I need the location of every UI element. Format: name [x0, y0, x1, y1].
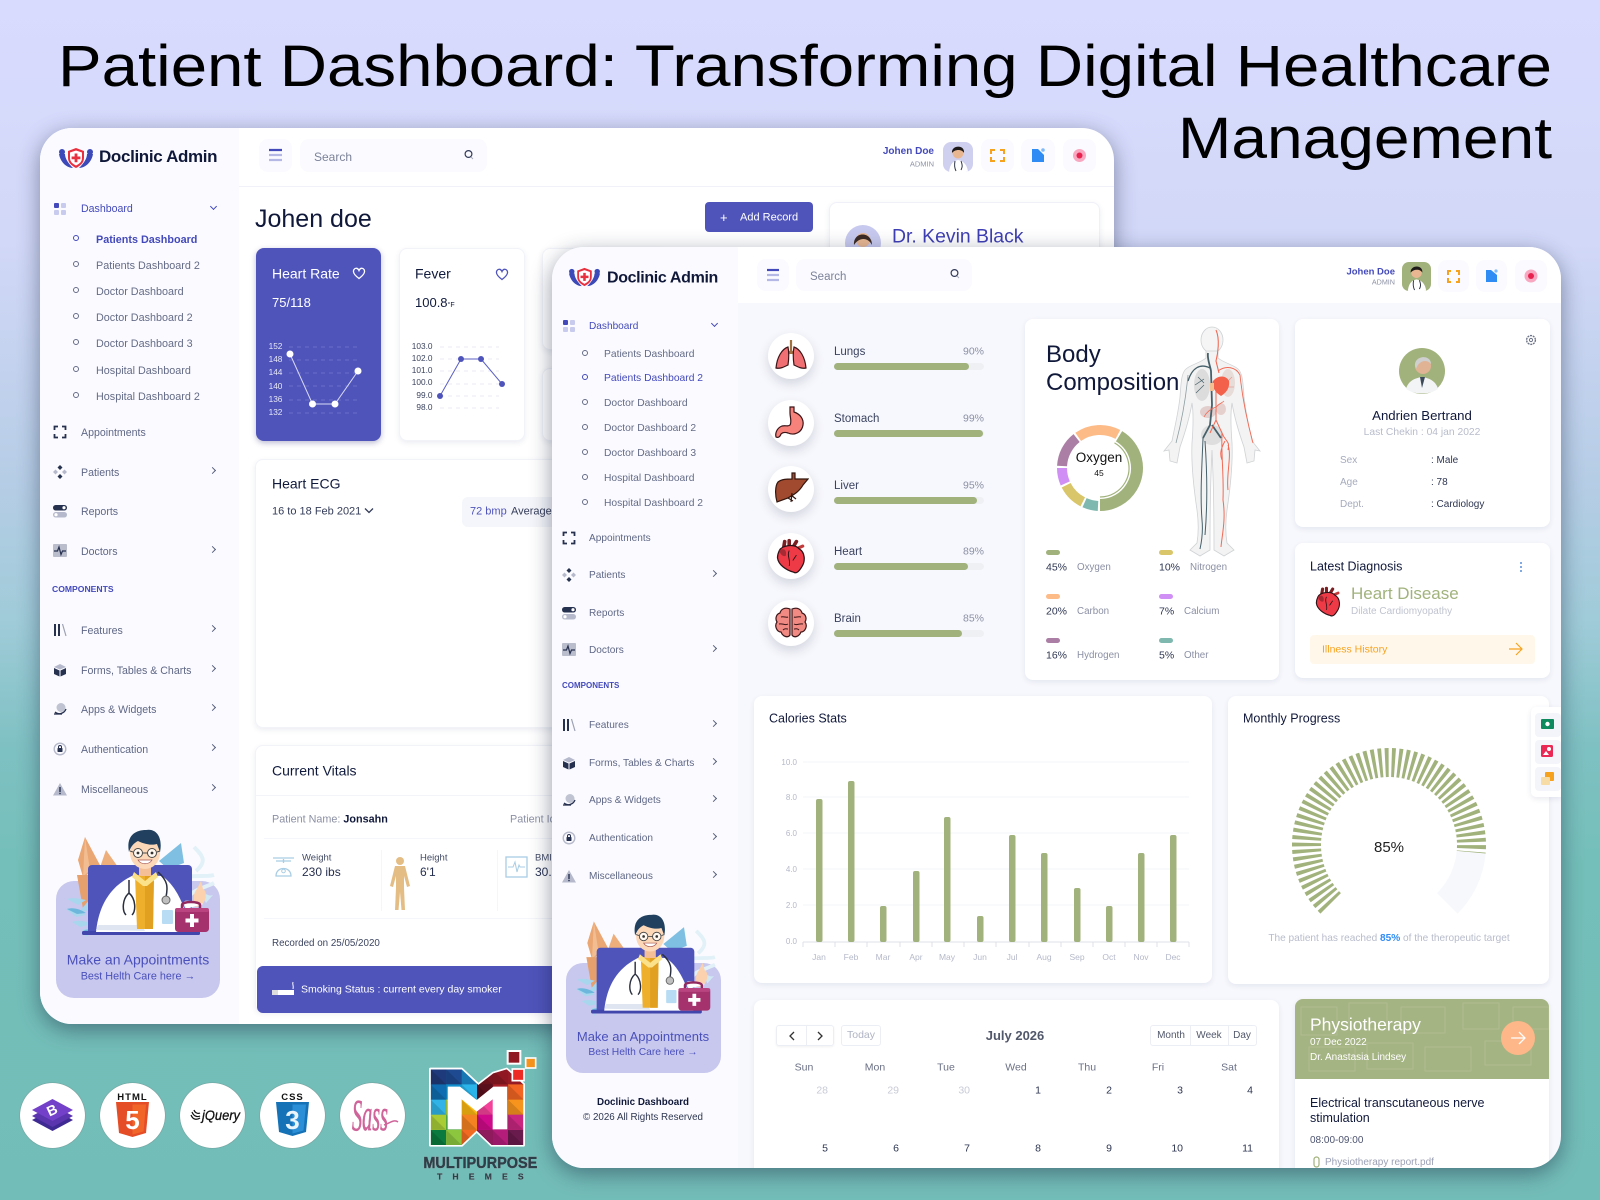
menu: reports: Reports	[81, 506, 118, 518]
icon: heart	[1314, 584, 1342, 619]
menu: miscellaneous	[53, 783, 216, 796]
search box	[796, 259, 972, 291]
menu: patients	[562, 568, 717, 582]
menu: doctors	[53, 544, 216, 558]
card: calendar: Week	[1196, 1030, 1222, 1041]
avatar: user	[943, 142, 973, 172]
icon: flower	[1063, 139, 1096, 172]
panel: back dashboard window	[40, 128, 1114, 1024]
menu: doctors: Doctors	[589, 645, 624, 656]
organ row: liver: 95%	[963, 480, 984, 492]
card: calories stats	[754, 696, 1212, 983]
submenu: doctor dashboard: Doctor Dashboard	[96, 286, 184, 298]
calendar grid: 1	[1035, 1085, 1041, 1097]
chart: calories bars: Nov	[1133, 952, 1149, 962]
legend: body composition: 45%	[1046, 562, 1067, 574]
card: fever: 100.8°F	[415, 295, 455, 310]
menu: doctors: Doctors	[81, 546, 118, 558]
chart: heart rate line: 136	[269, 394, 283, 404]
card: heart ecg: Heart ECG	[272, 476, 340, 492]
menu: miscellaneous: Miscellaneous	[589, 871, 653, 882]
calendar grid: 11	[1242, 1143, 1253, 1155]
organ row: brain: 85%	[963, 613, 984, 625]
legend: body composition: 20%	[1046, 606, 1067, 618]
calendar grid: 30	[958, 1085, 970, 1097]
icon: html5: 5	[125, 1105, 140, 1135]
user name: ADMIN	[910, 160, 934, 168]
card: calendar: July 2026	[986, 1028, 1044, 1043]
legend: body composition	[1046, 550, 1256, 665]
calendar grid: Mon	[865, 1062, 885, 1074]
card: heart ecg: 72 bmp	[470, 505, 507, 517]
icon: html5: HTML	[117, 1092, 148, 1103]
organ row: liver	[768, 466, 984, 512]
legend: body composition: 10%	[1159, 562, 1180, 574]
menu: apps	[563, 794, 717, 806]
menu: miscellaneous: Miscellaneous	[81, 784, 148, 796]
submenu: hospital dashboard 2: Hospital Dashboard 2	[96, 391, 200, 403]
legend: body composition: 7%	[1159, 606, 1174, 618]
chart: fever line: 103.0	[412, 341, 433, 351]
chart: calories bars: Oct	[1102, 952, 1116, 962]
sidebar: back window	[40, 128, 239, 1024]
card: body composition	[1025, 319, 1279, 680]
logo: multipurpose themes	[423, 1050, 537, 1181]
cards: partly hidden vitals	[542, 248, 668, 350]
promo card: appointments	[56, 830, 220, 998]
card: fever: Fever	[415, 266, 451, 282]
menu: appointments: Appointments	[589, 533, 651, 544]
menu: forms	[563, 757, 717, 770]
icon: sass	[340, 1083, 405, 1148]
menu: appointments	[562, 532, 651, 544]
card: current vitals: Patient Id: 8566	[510, 814, 586, 826]
menu: forms: Forms, Tables & Charts	[589, 758, 694, 769]
icon: brain	[768, 600, 814, 646]
title	[58, 34, 1552, 171]
organ row: heart: 89%	[963, 546, 984, 558]
icon: stomach	[768, 400, 814, 446]
menu: miscellaneous	[561, 867, 721, 883]
card: physiotherapy: Physiotherapy report.pdf	[1325, 1157, 1434, 1168]
card: doctor: Dr. Kevin Black	[892, 225, 1023, 247]
icon: css3: CSS	[281, 1092, 304, 1103]
card: monthly progress: Monthly Progress	[1243, 712, 1340, 726]
calendar grid: 2	[1106, 1085, 1112, 1097]
calendar controls	[776, 1025, 834, 1046]
organ row: heart: Heart	[834, 546, 862, 558]
menu: features: Features	[589, 720, 629, 731]
icon: more dots	[1519, 561, 1523, 573]
card: patient profile	[1295, 319, 1550, 527]
icon: flower	[1515, 260, 1547, 292]
chart: heart rate line: 144	[269, 367, 283, 377]
user name: ADMIN	[1372, 278, 1395, 287]
legend: body composition: Calcium	[1184, 606, 1219, 617]
menu: features	[563, 718, 717, 732]
icon: lungs	[768, 333, 814, 379]
organ row: lungs: Lungs	[834, 346, 865, 358]
organ row: liver: Liver	[834, 480, 859, 492]
chart: fever line: 101.0	[412, 365, 433, 375]
menu: dashboard	[54, 203, 133, 215]
icon: file	[1021, 139, 1055, 172]
card: heart ecg: Average	[511, 505, 552, 517]
calendar grid: Fri	[1152, 1062, 1164, 1074]
promo card: appointments	[561, 910, 730, 1073]
icon: liver	[768, 466, 814, 512]
chart: fever line: 98.0	[416, 402, 433, 412]
submenu: doctor dashboard 2: Doctor Dashboard 2	[604, 423, 696, 434]
icon: paperclip	[1313, 1156, 1320, 1168]
chart: calories bars: 2.0	[786, 901, 798, 910]
header: back window	[239, 186, 1114, 187]
menu: reports	[53, 505, 118, 518]
organ row: lungs: 90%	[963, 346, 984, 358]
header: front window	[738, 247, 1561, 303]
menu: dashboard: Dashboard	[81, 203, 133, 215]
menu: appointments: Appointments	[81, 427, 146, 439]
menu: appointments	[54, 426, 146, 439]
menu: patients	[53, 465, 216, 479]
menu: apps: Apps & Widgets	[81, 704, 156, 716]
logo: Doclinic Admin	[99, 147, 217, 166]
calendar grid: Wed	[1005, 1062, 1027, 1074]
card: current vitals: Smoking Status : current every day smoker	[301, 984, 502, 996]
legend: body composition: Nitrogen	[1190, 562, 1227, 573]
promo card: appointments: Make an Appointments	[67, 952, 209, 968]
card: monthly progress	[1228, 696, 1549, 984]
menu: patients: Patients	[589, 570, 625, 581]
organ row: brain: Brain	[834, 613, 861, 625]
chart: oxygen donut	[1052, 420, 1148, 516]
logo: multipurpose themes: THEMES	[437, 1171, 524, 1181]
banner: physiotherapy	[1295, 999, 1549, 1079]
card: doctor	[829, 202, 1100, 322]
organ row: heart	[768, 533, 984, 579]
card: physiotherapy: 08:00-09:00	[1310, 1135, 1363, 1146]
submenu: hospital dashboard 2: Hospital Dashboard 2	[604, 498, 703, 509]
chart: calories bars: Aug	[1036, 952, 1052, 962]
illustration: circulatory body	[1150, 325, 1270, 565]
card: patient profile: Age	[1340, 476, 1358, 488]
banner: physiotherapy: Physiotherapy	[1310, 1014, 1421, 1034]
menu: authentication	[54, 742, 216, 756]
organ row: stomach: Stomach	[834, 413, 879, 425]
calendar grid: 28	[816, 1085, 828, 1097]
button: add record: +	[720, 210, 728, 225]
calendar grid: 29	[887, 1085, 899, 1097]
menu: features	[54, 624, 216, 637]
footer: sidebar copyright	[580, 1095, 706, 1125]
avatar: user	[1402, 262, 1431, 291]
menu: authentication: Authentication	[589, 833, 653, 844]
card: physiotherapy	[1295, 999, 1549, 1189]
button: illness history: Illness History	[1322, 644, 1387, 656]
menu: reports	[562, 607, 624, 620]
chart: calories bars: Dec	[1165, 952, 1181, 962]
card: patient profile: : Cardiology	[1431, 499, 1484, 510]
button: add record: Add Record	[740, 211, 798, 223]
title: Patient Dashboard: Transforming Digital Healthcare	[58, 34, 1552, 99]
user name	[1330, 262, 1396, 288]
card: latest diagnosis: Dilate Cardiomyopathy	[1351, 606, 1452, 617]
card: heart ecg	[255, 459, 795, 728]
button: add record	[705, 202, 813, 232]
icon: jquery: jQuery	[200, 1107, 241, 1123]
calendar grid: 9	[1106, 1143, 1112, 1155]
card: heart rate: Heart Rate	[272, 266, 340, 282]
menu: authentication	[561, 829, 721, 845]
submenu: doctor dashboard 2: Doctor Dashboard 2	[96, 312, 193, 324]
chart: progress gauge	[1285, 742, 1493, 920]
icon: heart	[768, 533, 814, 579]
card: calendar: Today	[847, 1029, 875, 1041]
organ row: lungs	[768, 333, 984, 379]
avatar: patient	[1399, 348, 1445, 394]
card: body composition: Body	[1046, 341, 1101, 368]
organ row: stomach	[768, 400, 984, 446]
chart: oxygen donut: 45	[1094, 468, 1104, 478]
button: illness history	[1310, 635, 1535, 664]
logo	[569, 268, 718, 286]
card: patient profile: Sex	[1340, 455, 1357, 466]
legend: body composition: Hydrogen	[1077, 650, 1119, 661]
calendar grid: 3	[1177, 1085, 1183, 1097]
section label: components: COMPONENTS	[562, 681, 619, 690]
legend: body composition: Other	[1184, 650, 1209, 661]
calendar grid: Thu	[1078, 1062, 1096, 1074]
card: heart rate: 75/118	[272, 295, 311, 310]
card: calendar	[754, 1000, 1279, 1180]
icon: settings gear	[1525, 334, 1537, 346]
button: menu	[757, 259, 789, 291]
section label: components: COMPONENTS	[52, 584, 114, 594]
card: latest diagnosis	[1295, 543, 1550, 678]
search box: Search	[810, 271, 846, 283]
card: body composition: Composition	[1046, 368, 1179, 396]
menu: reports: Reports	[589, 608, 624, 619]
calendar grid: 10	[1171, 1143, 1183, 1155]
card: calendar: Month	[1157, 1030, 1185, 1041]
icon: css3: 3	[285, 1105, 300, 1135]
search box	[300, 139, 487, 172]
user name: Johen Doe	[883, 146, 934, 157]
chart: calories bars	[775, 750, 1200, 970]
chart: fever line	[412, 341, 505, 412]
chart: calories bars: May	[939, 952, 956, 962]
promo card: appointments: Best Helth Care here →	[588, 1047, 698, 1058]
icon: css3	[260, 1083, 325, 1148]
chart: heart rate line	[269, 341, 362, 417]
banner: physiotherapy: Dr. Anastasia Lindsey	[1310, 1052, 1406, 1063]
legend: body composition: Oxygen	[1077, 562, 1111, 573]
chart: calories bars: 0.0	[786, 937, 798, 946]
logo: Doclinic Admin	[607, 269, 718, 286]
chart: calories bars: 10.0	[781, 758, 798, 767]
calendar grid: Tue	[937, 1062, 955, 1074]
organ row: brain	[768, 600, 984, 646]
card: latest diagnosis: Heart Disease	[1351, 584, 1459, 603]
organ row: stomach: 99%	[963, 413, 984, 425]
menu: patients: Patients	[81, 467, 119, 479]
chart: calories bars: Feb	[844, 952, 859, 962]
submenu: hospital dashboard: Hospital Dashboard	[96, 365, 191, 377]
card: current vitals	[255, 745, 795, 1012]
chart: calories bars: Jan	[812, 952, 826, 962]
chart: fever line: 99.0	[416, 390, 433, 400]
user name	[883, 146, 934, 168]
card: patient profile: Last Chekin : 04 jan 2022	[1364, 426, 1480, 437]
card: current vitals: 6'1	[420, 865, 436, 879]
calendar grid: 6	[893, 1143, 899, 1155]
card: current vitals: Recorded on 25/05/2020	[272, 938, 380, 949]
panel: front dashboard window	[552, 247, 1561, 1168]
logo: multipurpose themes: MULTIPURPOSE	[423, 1155, 537, 1172]
button: menu	[259, 139, 292, 172]
sidebar: front window	[552, 247, 738, 1168]
search box: Search	[314, 150, 352, 164]
card: patient profile: : Male	[1431, 455, 1458, 466]
chart: fever line: 100.0	[412, 377, 433, 387]
card: patient profile: Dept.	[1340, 499, 1364, 510]
icon: jquery	[180, 1083, 245, 1148]
card: current vitals: BMI	[535, 852, 552, 863]
icon: html5	[100, 1083, 165, 1148]
chart: calories bars: Apr	[909, 952, 923, 962]
logo	[59, 147, 217, 168]
card: patient profile: : 78	[1431, 476, 1448, 488]
chart: oxygen donut: Oxygen	[1076, 450, 1122, 465]
card: current vitals: Current Vitals	[272, 763, 357, 779]
card: heart rate	[256, 248, 381, 441]
chart: heart rate line: 140	[269, 381, 283, 391]
footer: sidebar copyright: Doclinic Dashboard	[597, 1097, 689, 1108]
card: current vitals: Patient Name: Jonsahn	[272, 814, 388, 826]
icon: fullscreen	[981, 139, 1014, 172]
menu: dashboard	[563, 320, 638, 332]
menu: features: Features	[81, 625, 123, 637]
card: heart ecg: 16 to 18 Feb 2021	[272, 505, 361, 517]
panel: floating tools	[1531, 707, 1561, 797]
calendar grid	[754, 1060, 1279, 1160]
calendar grid: Sun	[795, 1062, 813, 1074]
icons: technology badges	[20, 1082, 406, 1148]
card: latest diagnosis: Latest Diagnosis	[1310, 560, 1402, 574]
icon: bootstrap	[20, 1083, 85, 1148]
calendar grid: 7	[964, 1143, 970, 1155]
title: Management	[1178, 106, 1552, 171]
submenu: doctor dashboard: Doctor Dashboard	[604, 398, 688, 409]
chart: calories bars: Jul	[1007, 952, 1018, 962]
icon: file	[1476, 260, 1507, 292]
chart: heart rate line: 132	[269, 407, 283, 417]
footer: sidebar copyright: © 2026 All Rights Reserved	[583, 1112, 703, 1123]
menu: authentication: Authentication	[81, 744, 148, 756]
chart: calories bars: Sep	[1069, 952, 1085, 962]
legend: body composition: Carbon	[1077, 606, 1109, 617]
submenu: hospital dashboard: Hospital Dashboard	[604, 473, 694, 484]
card: current vitals: 230 ibs	[302, 865, 341, 879]
card: calories stats: Calories Stats	[769, 712, 847, 726]
calendar grid: Sat	[1221, 1062, 1237, 1074]
chart: fever line: 102.0	[412, 353, 433, 363]
submenu: patients dashboard: Patients Dashboard	[604, 349, 694, 360]
legend: body composition: 16%	[1046, 650, 1067, 662]
menu: doctors	[562, 643, 717, 656]
chart: calories bars: 6.0	[786, 829, 798, 838]
submenu: patients dashboard 2: Patients Dashboard 2	[96, 260, 200, 272]
promo card: appointments: Best Helth Care here →	[81, 971, 195, 983]
button: arrow	[1501, 1021, 1535, 1055]
card: physiotherapy: Electrical transcutaneous nerve stimulation	[1310, 1096, 1484, 1125]
chart: calories bars: Mar	[876, 952, 890, 962]
card: calendar: Day	[1233, 1030, 1251, 1041]
menu: apps: Apps & Widgets	[589, 795, 661, 806]
chart: heart rate line: 152	[269, 341, 283, 351]
card: monthly progress: The patient has reached 85% of the theropeutic target	[1268, 933, 1510, 944]
chart: heart rate line: 148	[269, 354, 283, 364]
heading: Johen doe: Johen doe	[255, 205, 372, 233]
submenu: doctor dashboard 3: Doctor Dashboard 3	[604, 448, 696, 459]
chart: calories bars: 8.0	[786, 793, 798, 802]
card: current vitals: Height	[420, 852, 447, 863]
user name: Johen Doe	[1346, 266, 1395, 277]
chart: calories bars: Jun	[973, 952, 987, 962]
card: fever	[399, 248, 525, 441]
card: current vitals: 30.5	[535, 865, 558, 879]
icon: bootstrap: B	[44, 1101, 60, 1119]
menu: apps	[54, 703, 216, 716]
menu: forms	[54, 664, 216, 677]
legend: body composition: 5%	[1159, 650, 1174, 662]
chart: progress gauge: 85%	[1374, 839, 1404, 856]
card: current vitals: Weight	[302, 852, 331, 863]
submenu: patients dashboard 2: Patients Dashboard 2	[604, 373, 703, 384]
calendar grid: 8	[1035, 1143, 1041, 1155]
card: patient profile: Andrien Bertrand	[1372, 408, 1472, 423]
calendar grid: 5	[822, 1143, 828, 1155]
menu: dashboard: Dashboard	[589, 321, 638, 332]
calendar grid: 4	[1247, 1085, 1253, 1097]
submenu: doctor dashboard 3: Doctor Dashboard 3	[96, 338, 193, 350]
chart: calories bars: 4.0	[786, 865, 798, 874]
icon: fullscreen	[1438, 260, 1469, 292]
banner: physiotherapy: 07 Dec 2022	[1310, 1037, 1367, 1048]
menu: forms: Forms, Tables & Charts	[81, 665, 191, 677]
submenu: patients dashboard: Patients Dashboard	[96, 234, 197, 246]
promo card: appointments: Make an Appointments	[577, 1029, 709, 1044]
